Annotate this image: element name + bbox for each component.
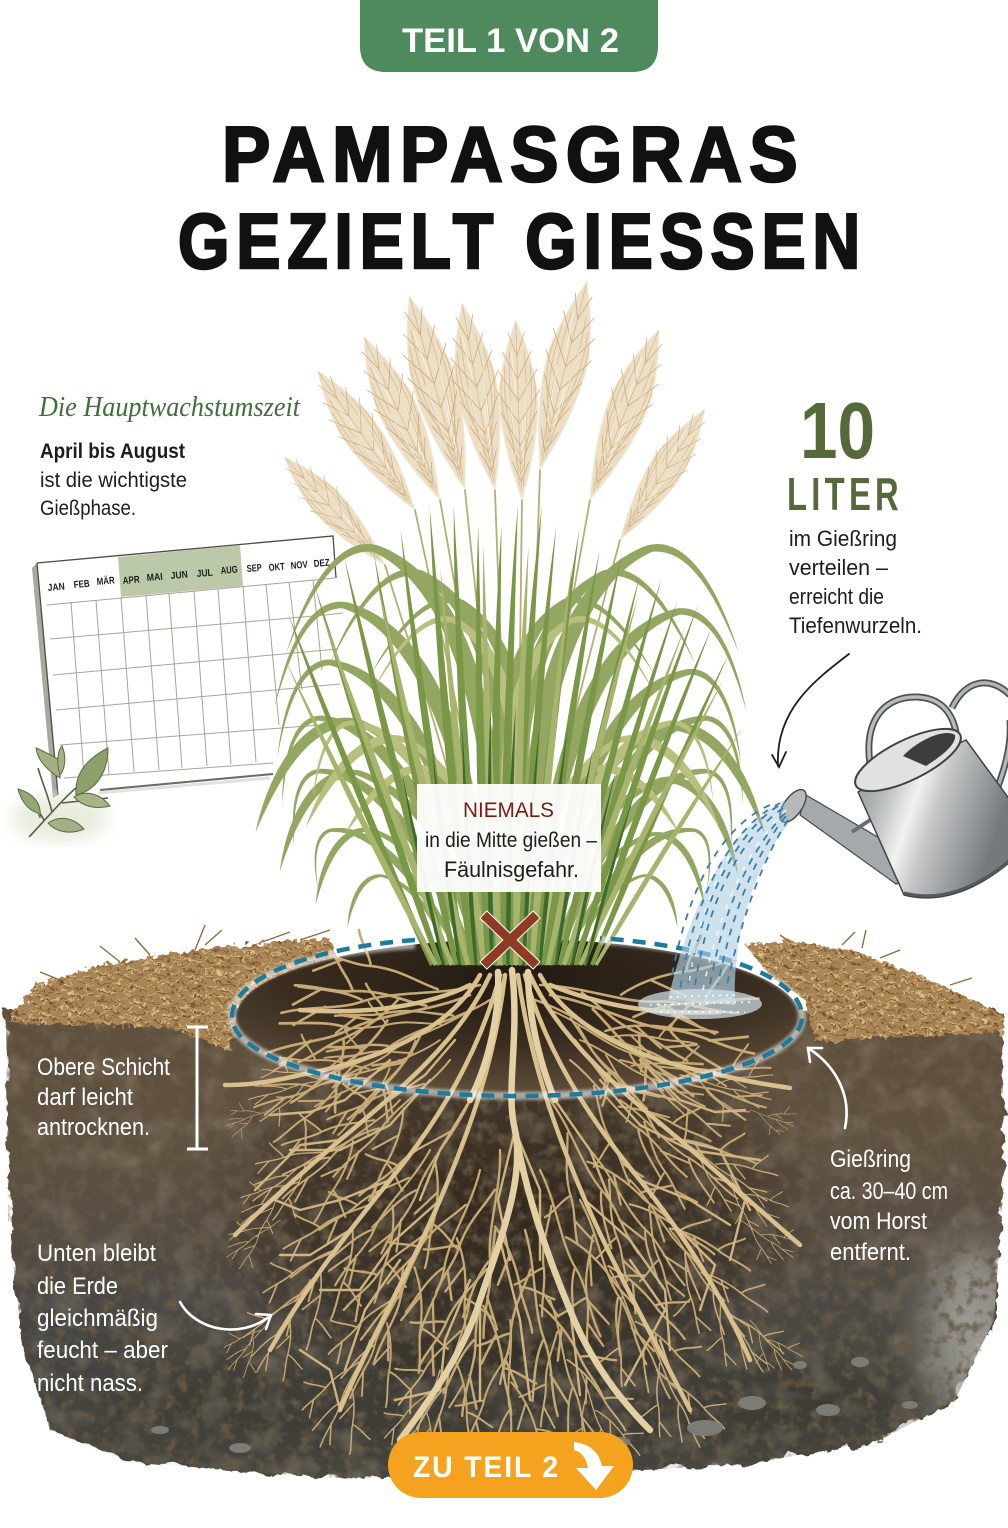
label: upper layer xyxy=(37,1054,170,1141)
callout: 10 Liter xyxy=(787,386,922,638)
label: lower layer: die Erde xyxy=(37,1273,118,1300)
secondary roots xyxy=(255,1040,760,1410)
dashed watering ring xyxy=(232,938,802,1096)
label: lower layer: gleichmäßig xyxy=(37,1305,158,1332)
title: PAMPASGRAS xyxy=(222,110,805,198)
label: watering ring distance: entfernt. xyxy=(830,1239,911,1266)
big number: 10 xyxy=(800,386,875,475)
calendar xyxy=(32,536,345,798)
handwritten heading: Die Hauptwachstumszeit xyxy=(38,391,301,423)
month labels: JAN xyxy=(47,582,65,594)
growth phase description: Gießphase. xyxy=(40,497,136,520)
highlighted months xyxy=(118,545,243,597)
month labels: FEB xyxy=(73,579,90,591)
main roots xyxy=(225,975,800,1410)
month labels: DEZ xyxy=(313,558,330,570)
arching leaves xyxy=(256,540,765,1009)
top badge: Teil 1 von 2: TEIL 1 VON 2 xyxy=(402,22,619,60)
mulch right xyxy=(745,930,1004,1042)
growth phase description: ist die wichtigste xyxy=(40,469,187,492)
text block: Hauptwachstumszeit xyxy=(38,391,301,520)
fine root branches xyxy=(211,914,809,1483)
label: upper layer: darf leicht xyxy=(37,1084,133,1111)
month labels: MAI xyxy=(146,572,163,584)
arrow: to moist soil xyxy=(180,1302,271,1330)
label: lower layer xyxy=(37,1240,168,1397)
label: watering ring distance: vom Horst xyxy=(830,1208,927,1235)
label: lower layer: Unten bleibt xyxy=(37,1240,156,1267)
watercolor lower corners xyxy=(925,1240,1008,1440)
growth phase description xyxy=(40,440,187,520)
month labels: JUL xyxy=(196,568,213,580)
tap roots xyxy=(400,970,650,1440)
description: verteilen – xyxy=(789,555,889,580)
growth phase description: April bis August xyxy=(40,440,185,463)
month labels: NOV xyxy=(290,560,308,572)
callout: never water the center: in die Mitte gießen – xyxy=(425,829,597,852)
month labels: JUN xyxy=(170,570,188,582)
splash droplets xyxy=(650,995,750,1012)
title: GEZIELT GIESSEN xyxy=(178,197,867,285)
can rim and opening xyxy=(847,717,969,803)
label: lower layer: feucht – aber xyxy=(37,1337,168,1364)
depth bracket xyxy=(187,1027,208,1149)
callout: never water the center: Fäulnisgefahr. xyxy=(444,857,579,882)
label: lower layer: nicht nass. xyxy=(37,1370,143,1397)
month labels: SEP xyxy=(246,563,262,575)
watering can xyxy=(775,683,1008,898)
soil cross section xyxy=(0,1010,1008,1480)
mulch left xyxy=(8,925,345,1052)
label: upper layer: Obere Schicht xyxy=(37,1054,170,1081)
top handle xyxy=(869,697,956,775)
button: to part 2 xyxy=(388,1432,633,1498)
icon: leaf sprig xyxy=(12,746,110,842)
soil inside watering ring xyxy=(236,939,800,1095)
icon: red cross xyxy=(487,918,533,962)
grass tuft xyxy=(256,276,765,1009)
description xyxy=(789,526,922,638)
label: watering ring distance: Gießring xyxy=(830,1146,911,1173)
label: watering ring distance xyxy=(830,1146,948,1266)
water stream xyxy=(638,800,788,1019)
title xyxy=(178,110,867,285)
description: im Gießring xyxy=(789,526,897,551)
description: erreicht die xyxy=(789,584,884,609)
arrow: liter to water xyxy=(772,654,849,767)
arrow: to ring xyxy=(808,1048,847,1128)
month labels: MÄR xyxy=(96,573,116,588)
month labels: OKT xyxy=(268,562,285,574)
unit: LITER xyxy=(787,468,903,520)
calendar grid xyxy=(47,578,343,778)
label: watering ring distance: ca. 30–40 cm xyxy=(830,1178,948,1205)
plumes xyxy=(271,276,721,577)
button: to part 2: ZU TEIL 2 xyxy=(413,1451,560,1484)
callout: never water the center: NIEMALS xyxy=(463,799,554,822)
description: Tiefenwurzeln. xyxy=(789,613,922,638)
icon: bent arrow xyxy=(574,1442,614,1490)
stones xyxy=(151,1357,918,1453)
roots xyxy=(211,914,809,1483)
spout xyxy=(800,795,908,884)
flower stems xyxy=(385,470,620,965)
month labels: APR xyxy=(122,574,141,587)
label: upper layer: antrocknen. xyxy=(37,1114,150,1141)
upright leaves xyxy=(275,505,729,969)
can body xyxy=(858,740,1008,898)
month labels xyxy=(47,558,330,594)
callout: never water the center xyxy=(417,784,601,892)
top badge: Teil 1 von 2 xyxy=(360,0,658,72)
back handle xyxy=(952,683,1008,802)
month labels: AUG xyxy=(220,565,238,577)
